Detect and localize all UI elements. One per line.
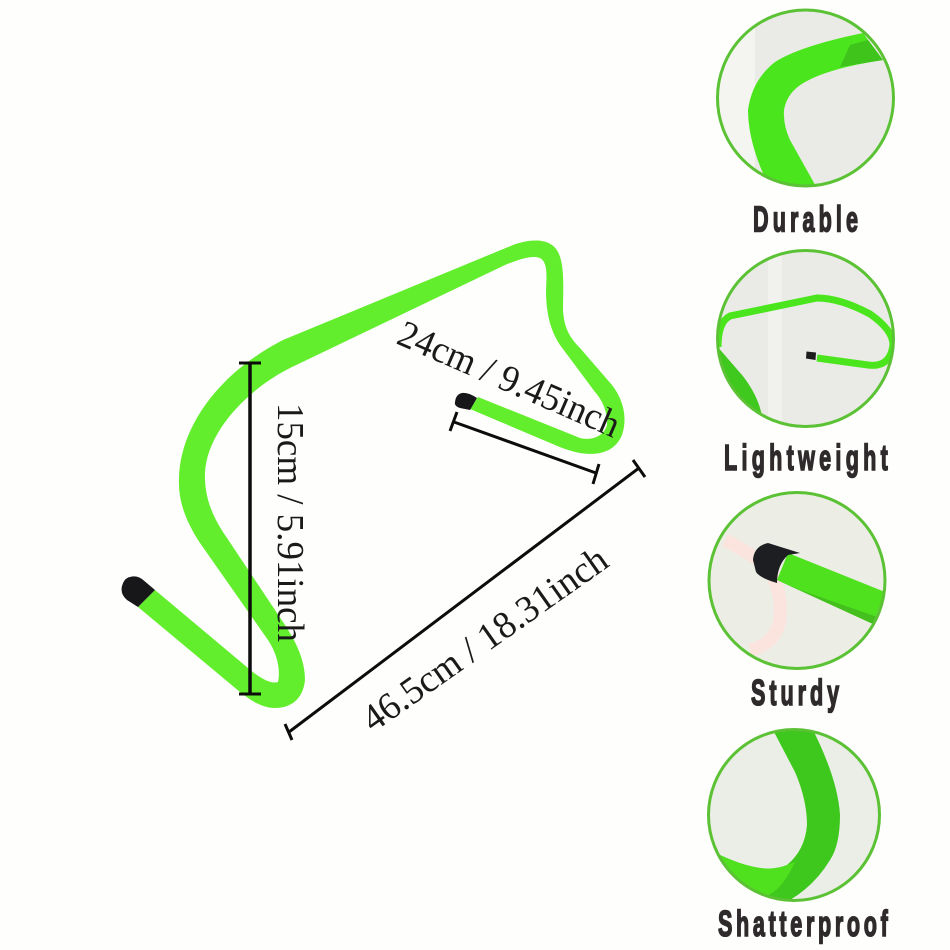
hurdle product <box>122 241 625 708</box>
depth dimension line <box>450 412 599 484</box>
label: Sturdy: Sturdy <box>751 673 840 713</box>
height label: 15cm / 5.91inch <box>269 403 311 642</box>
height dimension line <box>239 363 261 694</box>
width label: 46.5cm / 18.31inch <box>354 538 616 740</box>
label: Shatterproof: Shatterproof <box>718 904 888 944</box>
detail circle: curve <box>705 727 883 903</box>
left foot cap <box>122 576 155 607</box>
label: Durable: Durable <box>753 200 858 240</box>
detail circle: top rail <box>715 248 897 430</box>
circle outline <box>718 10 894 186</box>
detail circle: bend <box>715 8 897 190</box>
circle outline <box>718 250 894 426</box>
circle outline <box>709 492 885 668</box>
right foot cap <box>455 393 477 410</box>
width dimension line <box>285 460 645 740</box>
detail circle: end cap <box>710 494 884 667</box>
feature: sturdy <box>705 490 889 713</box>
label: Lightweight: Lightweight <box>724 438 888 478</box>
circle outline <box>708 730 880 900</box>
depth label: 24cm / 9.45inch <box>391 313 626 446</box>
hurdle tube <box>138 241 625 708</box>
feature: durable <box>715 8 897 240</box>
feature: lightweight <box>715 248 897 478</box>
feature: shatterproof <box>705 727 888 944</box>
